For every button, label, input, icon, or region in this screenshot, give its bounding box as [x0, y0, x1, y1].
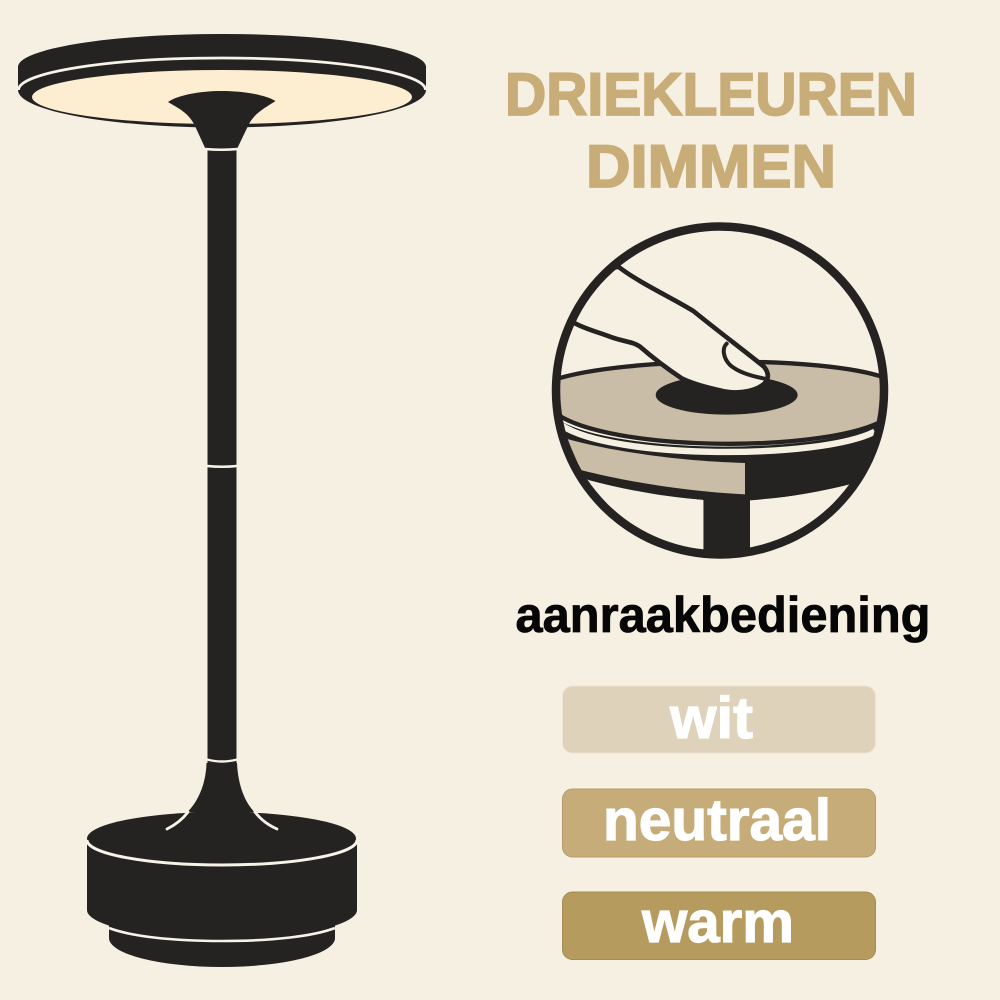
lamp head: [18, 34, 426, 128]
finger: [560, 267, 768, 392]
title: DIMMEN: [586, 133, 836, 200]
lamp shade edge: [564, 422, 876, 550]
button: wit: [562, 686, 876, 753]
stem joints: [205, 149, 238, 762]
lens ring: [556, 226, 884, 554]
lamp stem: [208, 150, 236, 765]
button: wit: wit: [669, 686, 753, 751]
button: neutraal: [562, 788, 876, 857]
lamp neck: [168, 91, 276, 150]
button: neutraal: neutraal: [603, 788, 831, 853]
lamp base: [87, 763, 357, 967]
title: DRIEKLEUREN: [505, 61, 917, 128]
caption: aanraakbediening: [516, 587, 930, 643]
table lamp illustration: [18, 34, 426, 967]
icon: finger touching lamp top: [553, 226, 887, 562]
title: [505, 61, 917, 200]
button: warm: [562, 890, 876, 960]
lamp top disc: [553, 362, 887, 444]
button: warm: warm: [641, 890, 794, 955]
